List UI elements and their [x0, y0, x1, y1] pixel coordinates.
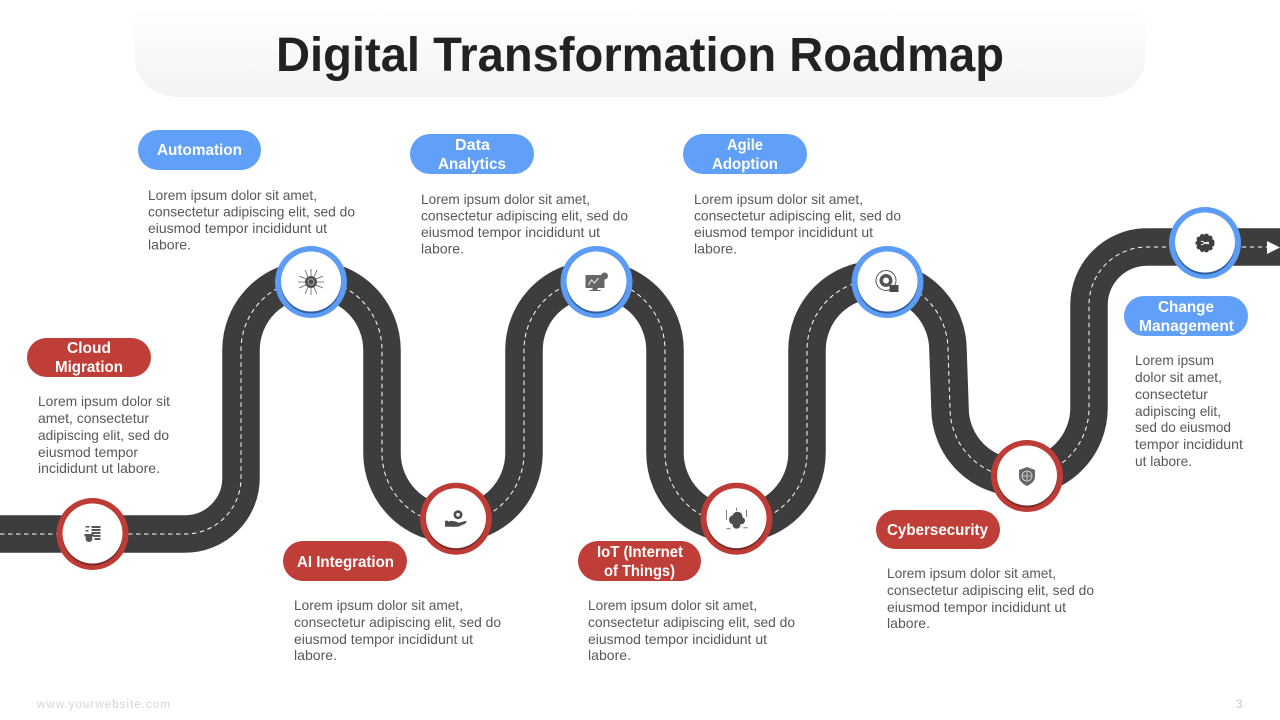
text: cybersecurity description: Lorem ipsum dolor sit amet, [887, 566, 1056, 581]
pill: automation [138, 130, 261, 170]
milestone 3: ai integration marker [420, 483, 492, 555]
pill: cybersecurity: Cybersecurity [887, 522, 988, 539]
text: change management description: Lorem ipsum [1135, 353, 1214, 368]
text: automation description: Lorem ipsum dolor sit amet, [148, 188, 317, 203]
step: automation [138, 130, 355, 252]
title banner [134, 8, 1146, 97]
milestone 4: data analytics marker [560, 246, 632, 318]
text: iot description: Lorem ipsum dolor sit amet, [588, 598, 757, 613]
text: cloud migration description: Lorem ipsum dolor sit [38, 394, 170, 409]
pill: data analytics: Analytics [438, 156, 506, 173]
text: change management description: adipiscing elit, [1135, 404, 1221, 419]
pill: cloud migration: Migration [55, 359, 123, 376]
text: cloud migration description: eiusmod tempor [38, 445, 138, 460]
text: agile adoption description: labore. [694, 242, 737, 256]
pill: iot [578, 541, 701, 581]
text: ai integration description: consectetur adipiscing elit, sed do [294, 615, 501, 630]
text: cloud migration description [38, 394, 170, 476]
text: agile adoption description: consectetur adipiscing elit, sed do [694, 208, 901, 224]
pill: agile adoption: Agile [727, 137, 763, 154]
icon: agile gear cycle [876, 270, 898, 292]
pill: agile adoption [683, 134, 807, 174]
pill: iot: of Things) [604, 563, 675, 580]
text: automation description: eiusmod tempor incididunt ut [148, 221, 327, 236]
text: change management description: ut labore. [1135, 454, 1192, 469]
pill: agile adoption: Adoption [712, 156, 778, 173]
text: data analytics description: Lorem ipsum dolor sit amet, [421, 192, 590, 207]
text: agile adoption description: Lorem ipsum dolor sit amet, [694, 192, 863, 207]
step: ai integration [283, 541, 501, 663]
pill: change management: Change [1158, 299, 1214, 316]
text: automation description: consectetur adipiscing elit, sed do [148, 204, 355, 220]
text: ai integration description: eiusmod tempor incididunt ut [294, 632, 473, 647]
milestone 1: cloud migration marker [56, 498, 128, 570]
pill: ai integration [283, 541, 407, 581]
icon: shield globe [1019, 467, 1035, 486]
footer website: www.yourwebsite.com [36, 699, 170, 711]
text: cybersecurity description [887, 566, 1094, 631]
milestone 7: cybersecurity marker [991, 440, 1063, 512]
text: iot description: labore. [588, 648, 631, 663]
text: iot description: eiusmod tempor incididunt ut [588, 632, 767, 647]
milestone 6: agile adoption marker [852, 246, 924, 318]
page number: 3 [1236, 699, 1242, 711]
winding road [0, 247, 1280, 534]
text: automation description [148, 188, 355, 252]
text: agile adoption description: eiusmod tempor incididunt ut [694, 225, 873, 240]
text: cloud migration description: incididunt ut labore. [38, 461, 160, 476]
text: iot description [588, 598, 795, 663]
pill: change management: Management [1139, 318, 1234, 335]
text: cybersecurity description: labore. [887, 616, 930, 631]
step: cybersecurity [876, 510, 1094, 631]
pill: automation: Automation [157, 142, 242, 159]
step: cloud migration [27, 338, 170, 476]
pill: data analytics [410, 134, 534, 174]
text: cloud migration description: amet, consectetur [38, 411, 149, 426]
milestone 8: change management marker [1169, 207, 1241, 279]
pill: iot: IoT (Internet [597, 544, 683, 561]
text: cybersecurity description: consectetur adipiscing elit, sed do [887, 583, 1094, 598]
step: change management [1124, 296, 1248, 469]
milestone 2: automation marker [275, 246, 347, 318]
text: ai integration description [294, 598, 501, 663]
pill: cybersecurity [876, 510, 1000, 549]
text: data analytics description [421, 192, 628, 256]
text: change management description: dolor sit amet, [1135, 370, 1222, 385]
step: agile adoption [683, 134, 901, 256]
pill: data analytics: Data [455, 137, 490, 154]
text: data analytics description: consectetur adipiscing elit, sed do [421, 208, 628, 224]
text: iot description: consectetur adipiscing elit, sed do [588, 615, 795, 630]
text: automation description: labore. [148, 238, 191, 252]
milestone 5: iot marker [700, 483, 772, 555]
title: Digital Transformation Roadmap [276, 29, 1004, 82]
text: cloud migration description: adipiscing elit, sed do [38, 428, 169, 443]
text: cybersecurity description: eiusmod tempor incididunt ut [887, 600, 1066, 615]
text: data analytics description: eiusmod tempor incididunt ut [421, 225, 600, 240]
pill: cloud migration: Cloud [67, 340, 111, 357]
text: change management description [1135, 353, 1243, 469]
icon: cloud migration list [84, 526, 100, 542]
text: agile adoption description [694, 192, 901, 256]
road end arrow [1267, 241, 1280, 254]
icon: hand holding gear [445, 510, 466, 527]
step: data analytics [410, 134, 628, 256]
text: ai integration description: Lorem ipsum dolor sit amet, [294, 598, 463, 613]
text: data analytics description: labore. [421, 242, 464, 256]
icon: change gear [1196, 234, 1214, 252]
icon: analytics monitor [586, 272, 608, 291]
text: change management description: consectetur [1135, 387, 1208, 402]
icon: iot cloud globe [729, 512, 745, 529]
pill: cloud migration [27, 338, 151, 377]
text: change management description: tempor incididunt [1135, 437, 1243, 452]
pill: change management [1124, 296, 1248, 336]
text: ai integration description: labore. [294, 648, 337, 663]
text: change management description: sed do eiusmod [1135, 420, 1231, 435]
step: iot [578, 541, 795, 663]
icon: automation gear network [298, 269, 324, 295]
pill: ai integration: AI Integration [297, 554, 394, 571]
